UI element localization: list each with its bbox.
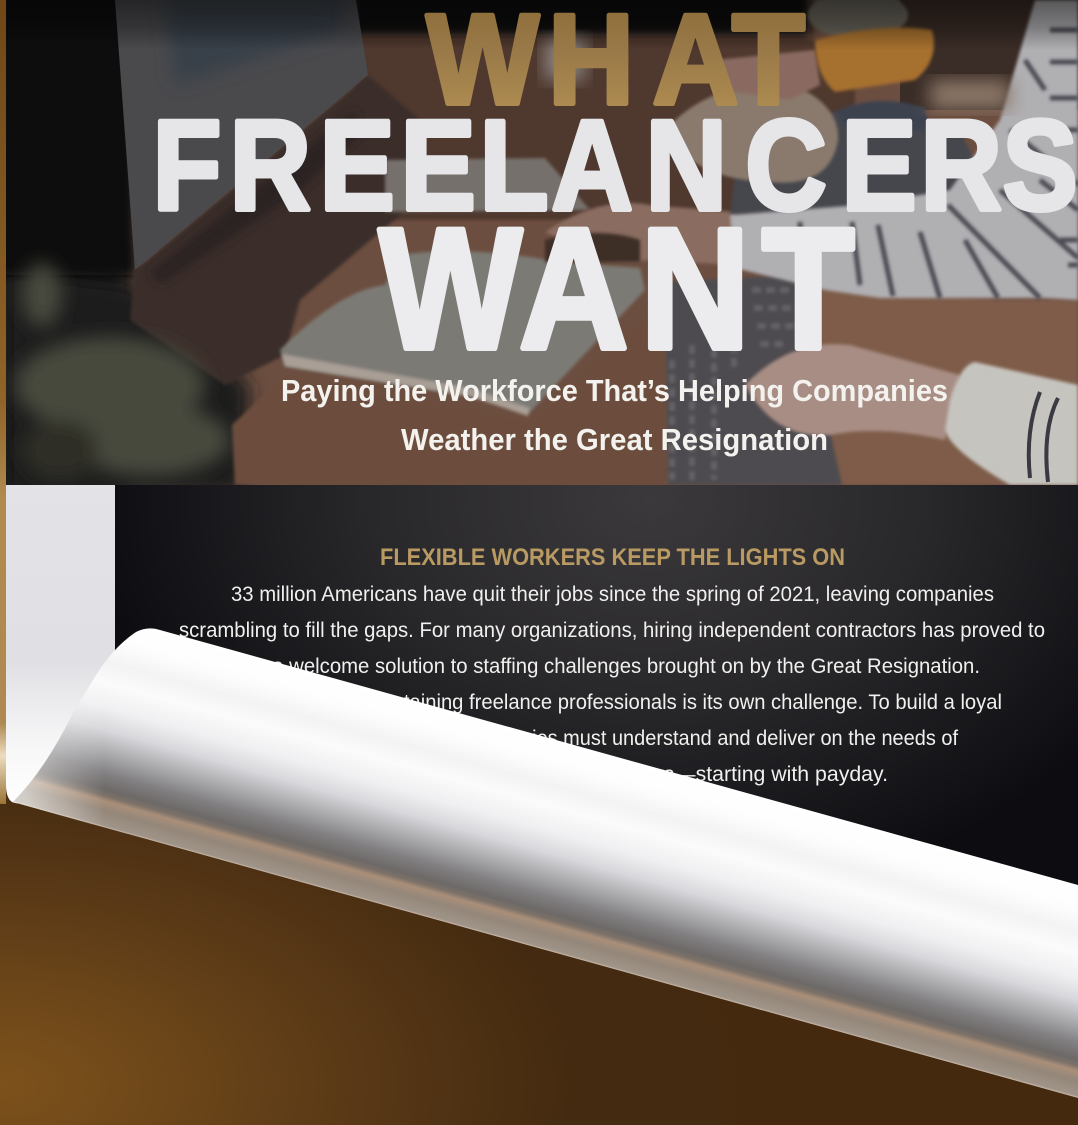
intro paragraph: their independent freelance workers—starting with payday. <box>336 762 888 786</box>
keyboard <box>665 275 842 485</box>
title word: FREELANCERS: FREELANCERS <box>153 94 1078 237</box>
page curl: rolled white sheet <box>13 621 1078 1098</box>
plant <box>15 263 230 480</box>
right hand <box>745 344 960 440</box>
striped sleeve <box>730 0 1078 300</box>
panel: header photo of people working at a desk <box>0 0 1078 500</box>
notebook <box>280 251 645 412</box>
top shade band <box>115 0 1078 46</box>
subtitle <box>281 373 948 457</box>
monitor <box>115 0 368 270</box>
subtitle line 2: Weather the Great Resignation <box>401 422 828 457</box>
cuff <box>945 362 1078 485</box>
gold page edge <box>0 0 6 804</box>
title <box>153 0 1078 385</box>
table wood lower <box>230 400 262 485</box>
intro paragraph: contingent workforce, companies must understand and deliver on the needs of <box>266 726 958 750</box>
lower left dark <box>6 249 134 485</box>
orange sweater <box>815 28 934 92</box>
intro paragraph: scrambling to fill the gaps. For many organizations, hiring independent contractors has proved to <box>179 618 1045 642</box>
left dark column <box>0 0 135 275</box>
wood desk upper <box>355 40 855 220</box>
heading: flexible workers: FLEXIBLE WORKERS KEEP THE LIGHTS ON <box>380 544 845 571</box>
panel: dark textured intro background <box>115 485 1078 900</box>
title word: WANT: WANT <box>379 193 854 385</box>
teddy bear <box>670 80 838 183</box>
left hand <box>545 203 735 265</box>
intro paragraph: be a welcome solution to staffing challenges brought on by the Great Resignation. <box>244 654 980 678</box>
monitor stand and desk shadow <box>130 75 420 385</box>
subtitle line 1: Paying the Workforce That’s Helping Companies <box>281 373 948 408</box>
light blur upper centre <box>545 38 585 80</box>
page flap: pale back of the page <box>6 485 115 804</box>
navy shirt <box>730 111 1000 215</box>
navy collar <box>836 100 929 128</box>
intro paragraph: 33 million Americans have quit their jobs since the spring of 2021, leaving companies <box>231 582 994 606</box>
forearm <box>715 50 820 100</box>
intro paragraph <box>179 582 1045 786</box>
intro paragraph: But attracting and retaining freelance professionals is its own challenge. To build a loyal <box>222 690 1002 714</box>
